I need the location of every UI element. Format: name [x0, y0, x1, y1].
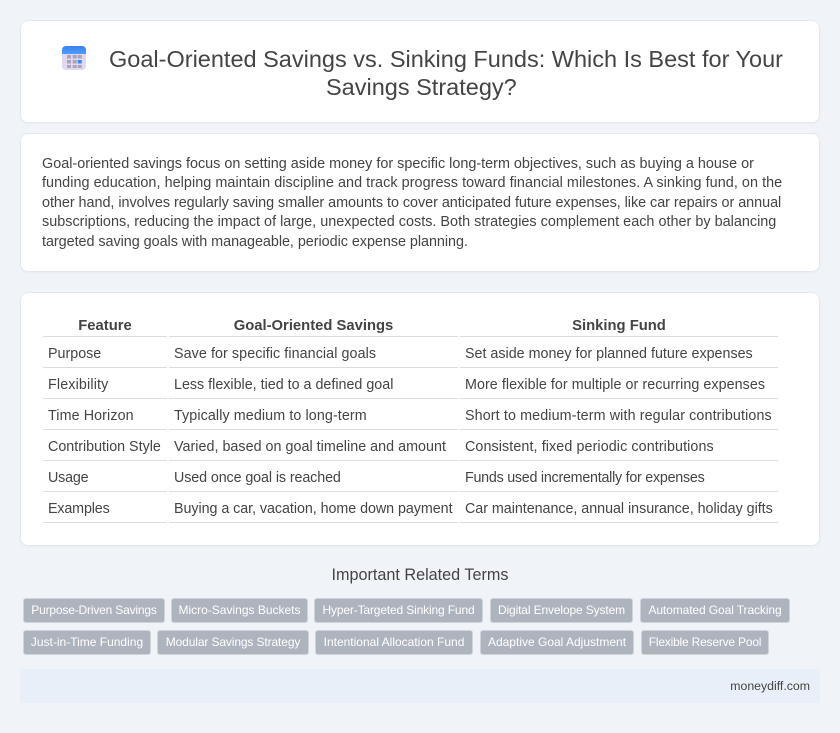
related terms tags: Purpose-Driven Savings	[31, 603, 157, 617]
comparison table: Used once goal is reached	[174, 470, 341, 486]
comparison table: Car maintenance, annual insurance, holiday gifts	[465, 501, 773, 517]
comparison table: Short to medium-term with regular contributions	[465, 408, 772, 424]
related terms tags: Micro-Savings Buckets	[178, 603, 301, 617]
footer source: moneydiff.com	[730, 679, 810, 693]
comparison table: Examples	[48, 501, 110, 517]
summary text: funding education, helping maintain discipline and track progress toward financial milestones. A sinking fund, on the	[42, 175, 782, 191]
summary text: targeted saving goals with manageable, periodic expense planning.	[42, 234, 468, 250]
panel: comparison table	[20, 292, 820, 546]
related terms tags: Adaptive Goal Adjustment	[488, 635, 626, 649]
comparison table: Varied, based on goal timeline and amount	[174, 439, 446, 455]
comparison table: Funds used incrementally for expenses	[465, 470, 704, 486]
comparison table: Usage	[48, 470, 88, 486]
comparison table: Goal-Oriented Savings	[234, 318, 393, 334]
comparison table: Consistent, fixed periodic contributions	[465, 439, 714, 455]
related terms tags: Flexible Reserve Pool	[649, 635, 761, 649]
summary text: other hand, involves regularly saving smaller amounts to cover anticipated future expenses, like car repairs or annual	[42, 194, 781, 210]
comparison table: Sinking Fund	[572, 318, 666, 334]
comparison table: Typically medium to long-term	[174, 408, 367, 424]
related terms tags: Hyper-Targeted Sinking Fund	[322, 603, 475, 617]
comparison table	[43, 318, 778, 523]
icon: calendar	[62, 46, 86, 70]
comparison table: Contribution Style	[48, 439, 161, 455]
heading: related terms: Important Related Terms	[332, 566, 508, 584]
related terms tags: Automated Goal Tracking	[648, 603, 782, 617]
related terms tags: Modular Savings Strategy	[166, 635, 300, 649]
comparison table: Feature	[78, 318, 132, 334]
summary text: subscriptions, reducing the impact of large, unexpected costs. Both strategies complement each other by balancing	[42, 214, 776, 230]
summary text: Goal-oriented savings focus on setting aside money for specific long-term objectives, such as buying a house or	[42, 156, 754, 172]
comparison table: Time Horizon	[48, 408, 134, 424]
summary text	[42, 156, 782, 250]
related terms tags: Intentional Allocation Fund	[324, 635, 464, 649]
comparison table: Save for specific financial goals	[174, 346, 376, 362]
related terms tags: Just-in-Time Funding	[31, 635, 143, 649]
panel: header	[20, 20, 820, 123]
related terms tags	[23, 598, 790, 655]
comparison table: Purpose	[48, 346, 101, 362]
comparison table: More flexible for multiple or recurring expenses	[465, 377, 765, 393]
title	[109, 46, 783, 100]
footer bar	[20, 669, 820, 703]
title: Goal-Oriented Savings vs. Sinking Funds: Which Is Best for Your	[109, 46, 783, 72]
panel: summary	[20, 133, 820, 272]
comparison table: Less flexible, tied to a defined goal	[174, 377, 393, 393]
comparison table: Flexibility	[48, 377, 108, 393]
comparison table: Buying a car, vacation, home down payment	[174, 501, 452, 517]
title: Savings Strategy?	[326, 74, 517, 100]
related terms tags: Digital Envelope System	[498, 603, 625, 617]
comparison table: Set aside money for planned future expenses	[465, 346, 753, 362]
